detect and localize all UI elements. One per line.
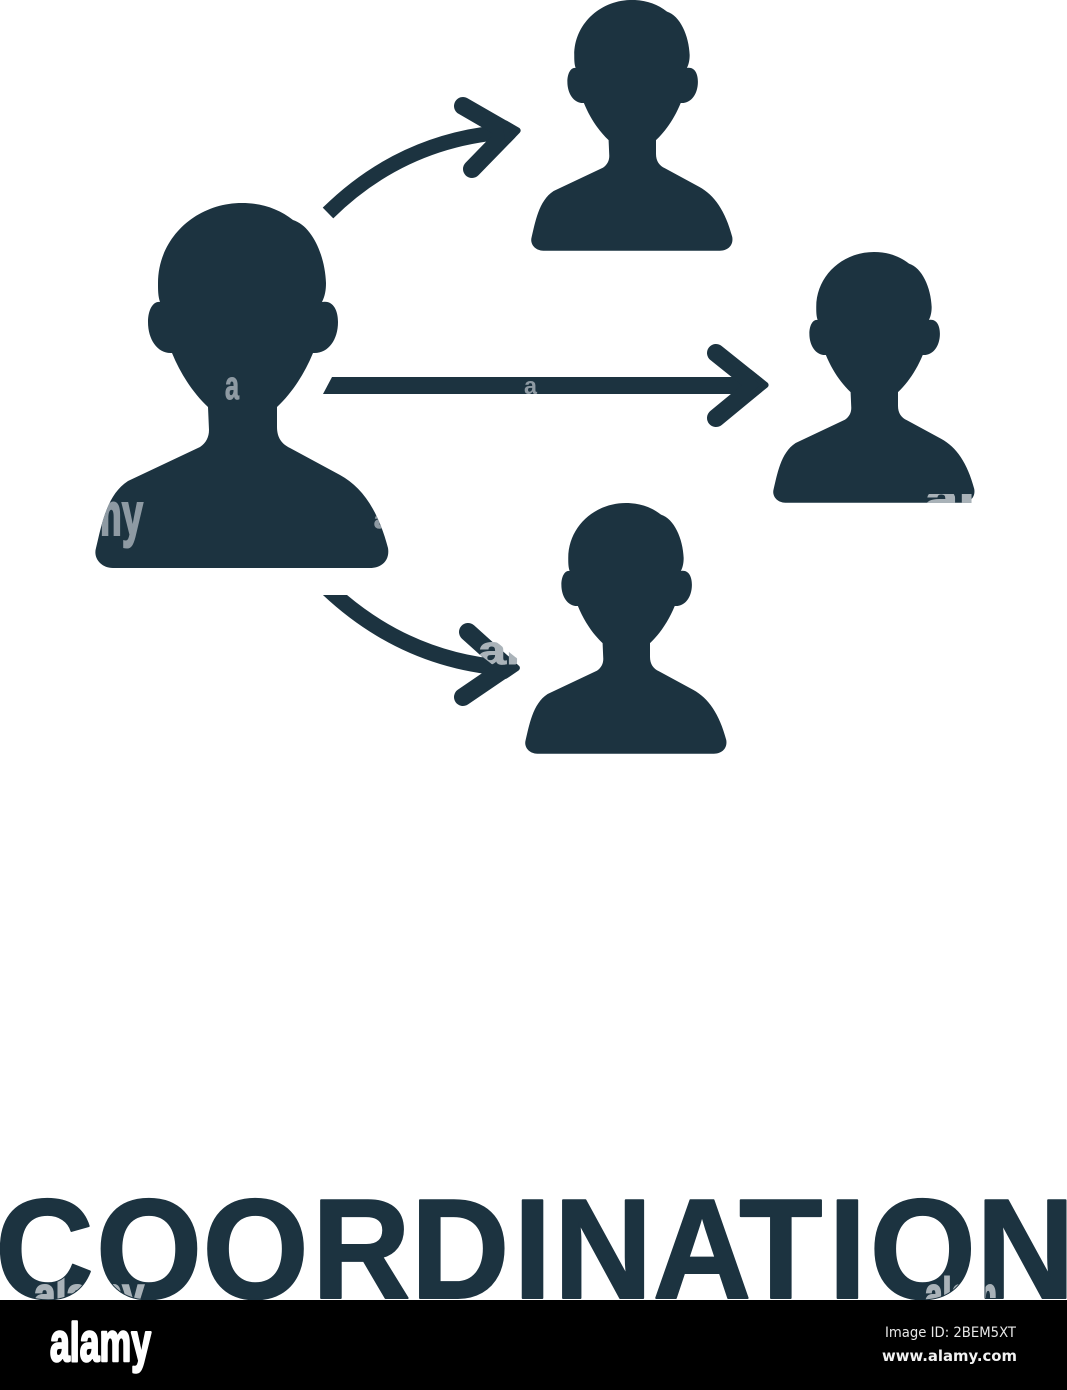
- arrow: straight to middle person: [323, 353, 766, 418]
- footer bar: [0, 1300, 1067, 1390]
- title: alam: [925, 1268, 997, 1320]
- icon: large source person: my: [88, 481, 143, 548]
- arrow: straight to middle person: a: [524, 373, 538, 400]
- image id: Image ID: 2BEM5XT: [885, 1325, 1016, 1341]
- icon: middle recipient person: al: [925, 477, 975, 521]
- icon: top recipient person: [531, 0, 732, 251]
- icon: large source person: a: [225, 364, 239, 408]
- arrow: curved down to bottom person: [322, 583, 520, 697]
- icon: middle recipient person: [773, 252, 975, 521]
- arrow: curved up to top person: [328, 106, 518, 213]
- icon: bottom recipient person: [525, 503, 726, 754]
- icon: large source person: [88, 203, 391, 568]
- title: alamy: [34, 1268, 144, 1320]
- title: COORDINATION: [0, 1170, 1067, 1329]
- icon: large source person: a: [374, 504, 391, 534]
- title: [0, 1198, 1067, 1300]
- website: www.alamy.com: [882, 1347, 1017, 1365]
- footer logo: alamy: [50, 1311, 151, 1373]
- arrow: curved down to bottom person: al: [478, 629, 520, 673]
